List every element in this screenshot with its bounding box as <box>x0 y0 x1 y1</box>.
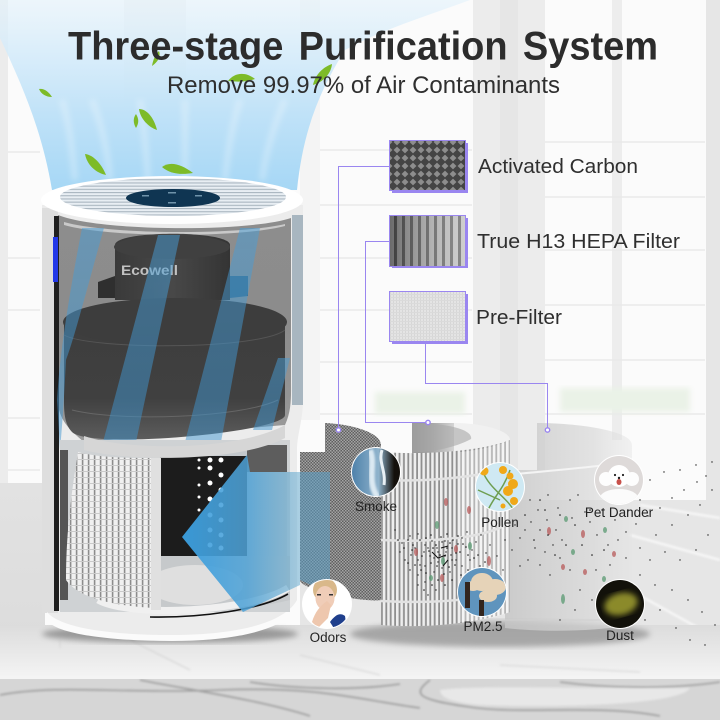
label: smoke: Smoke <box>355 499 397 514</box>
label: pet dander: Pet Dander <box>585 505 654 520</box>
motor housing <box>98 234 248 300</box>
connector: pre-filter <box>426 342 550 432</box>
collar ring under fan housing <box>84 425 285 458</box>
blue indicator strip <box>53 237 58 282</box>
connector: HEPA <box>366 242 430 425</box>
outer shell <box>42 205 303 637</box>
top air grille <box>60 178 286 216</box>
airflow: blue fan of clean air rising from purifier <box>0 0 470 190</box>
airflow beams inside glass <box>57 228 290 450</box>
icon: smoke <box>350 446 402 498</box>
label: pre-filter: Pre-Filter <box>476 307 562 329</box>
icon: odors woman pinching nose <box>302 578 352 630</box>
subtitle: Remove 99.97% of Air Contaminants <box>167 72 560 99</box>
dark glass upper chamber <box>58 215 291 442</box>
leaves <box>39 51 332 175</box>
filter swatch: pre-filter <box>390 292 468 344</box>
lower chamber interior <box>60 440 290 617</box>
label: odors: Odors <box>310 630 347 645</box>
filter stage: HEPA cylinder <box>381 423 510 626</box>
label: true H13 HEPA filter: True H13 HEPA Filter <box>477 231 680 253</box>
control display <box>126 189 220 207</box>
filter swatch: activated carbon <box>390 140 468 193</box>
icon: PM2.5 smokestacks <box>457 567 507 618</box>
icon: pet dander dog <box>594 455 644 507</box>
brand logo: Ecowell <box>121 262 178 278</box>
filter stage: activated carbon cylinder <box>300 423 381 600</box>
floor shadow <box>42 625 298 643</box>
icon: dust <box>595 579 645 629</box>
filter swatch: HEPA <box>390 216 468 268</box>
label: PM2.5: PM2.5 <box>463 619 503 634</box>
filter stage: pre-filter cylinder <box>505 423 632 631</box>
fan housing drum <box>63 298 287 439</box>
blue air intake arrow <box>182 455 300 612</box>
inner HEPA cylinder <box>66 452 161 610</box>
label: activated carbon: Activated Carbon <box>478 156 638 178</box>
pollutant particles <box>395 462 715 645</box>
bottom bowl <box>160 556 290 611</box>
label: pollen: Pollen <box>481 515 519 530</box>
label: dust: Dust <box>606 628 634 643</box>
filter floor shadow <box>350 621 650 647</box>
marble table top <box>0 625 720 678</box>
connector: activated carbon <box>336 166 389 432</box>
icon: pollen flowers <box>475 462 525 512</box>
purifier body <box>41 176 303 643</box>
top cap ring <box>41 176 303 224</box>
title: Three-stage Purification System <box>68 24 658 68</box>
marble front edge of table <box>0 677 720 720</box>
